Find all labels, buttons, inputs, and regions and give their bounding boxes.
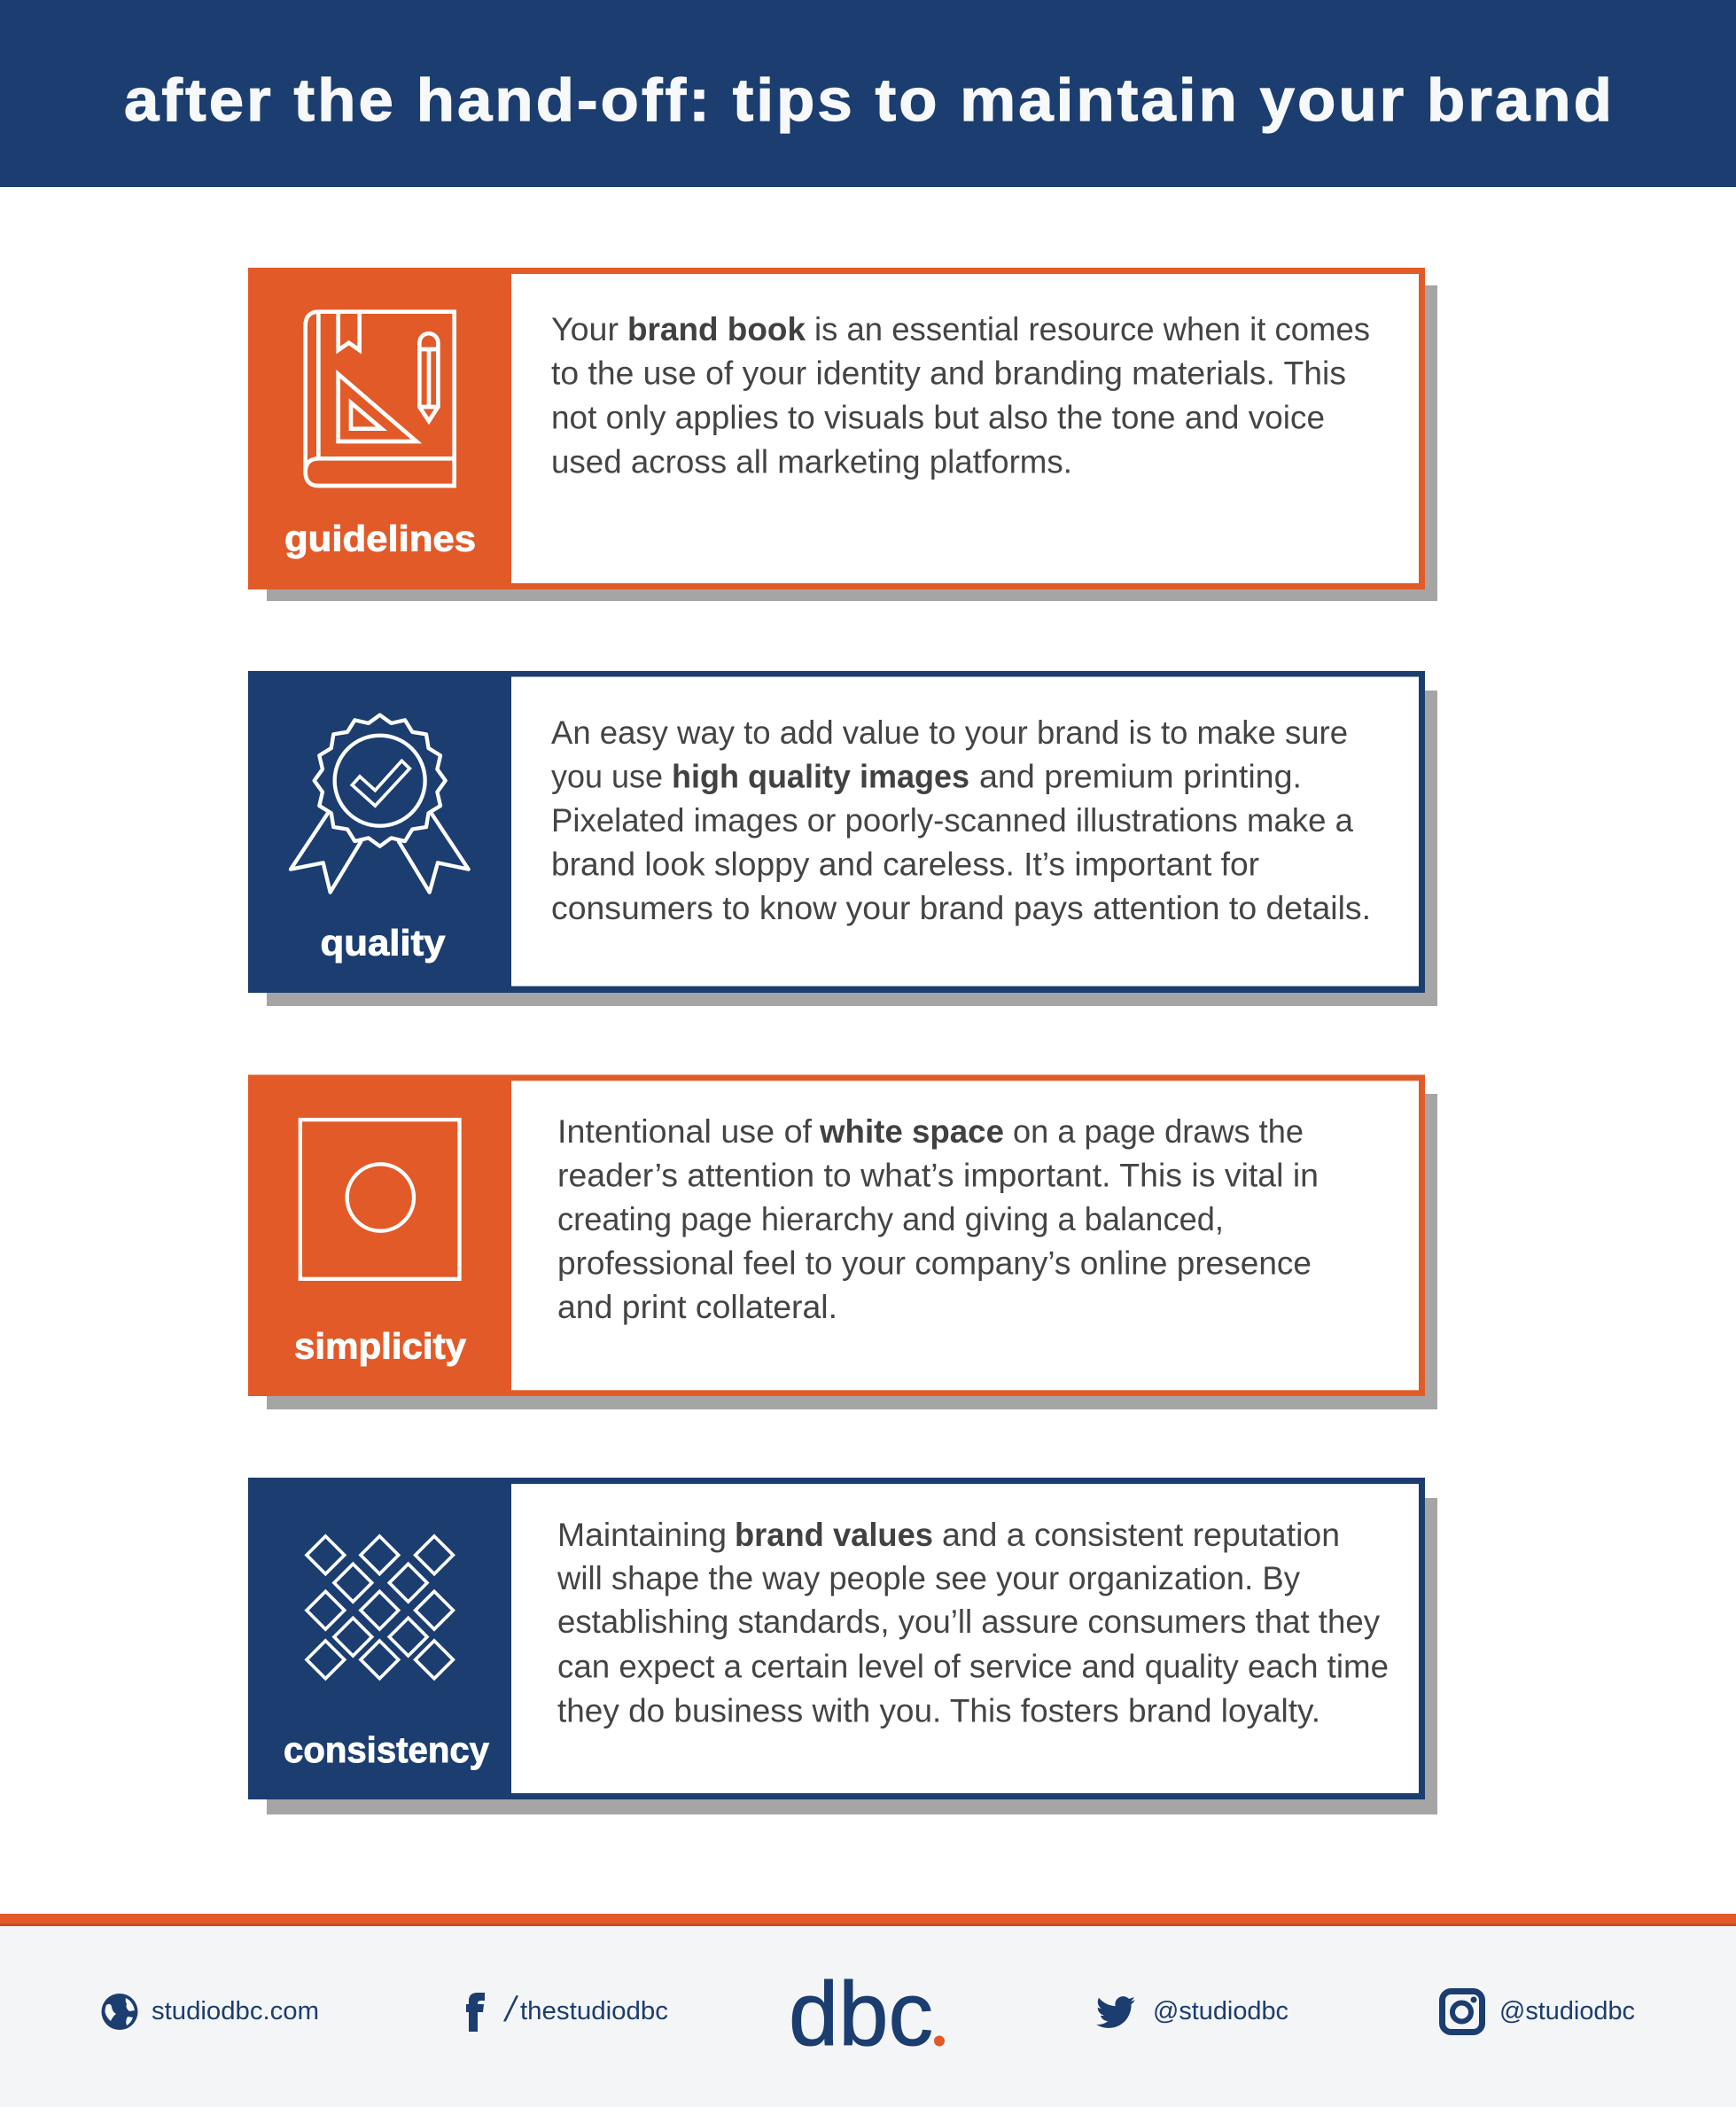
text block: quality: An easy way to add value to your brand is to make sure <box>551 714 1348 751</box>
title: after the hand-off: tips to maintain your brand <box>124 66 1615 134</box>
website link: studiodbc.com <box>152 1997 319 2025</box>
text block: quality: brand look sloppy and careless. It’s important for <box>551 847 1259 883</box>
header banner <box>0 0 1736 187</box>
text block: quality: high quality images <box>672 759 969 795</box>
text block: consistency: and a consistent reputation <box>942 1517 1340 1553</box>
text block: guidelines: not only applies to visuals but also the tone and voice <box>551 399 1325 435</box>
label: guidelines: guidelines <box>284 519 476 559</box>
text block: guidelines: used across all marketing platforms. <box>551 443 1072 480</box>
text block: consistency: Maintaining <box>557 1517 727 1553</box>
text block: consistency: brand values <box>735 1517 933 1553</box>
icon: circle in a square <box>300 1120 459 1279</box>
text block: simplicity: reader’s attention to what’s important. This is vital in <box>557 1158 1319 1194</box>
icon: book with set square and pencil <box>306 312 455 486</box>
text block: simplicity: on a page draws the <box>1013 1113 1304 1150</box>
panel: guidelines <box>248 268 1437 601</box>
logo: dbc: dbc <box>789 1963 933 2064</box>
text block: simplicity: and print collateral. <box>557 1289 837 1325</box>
twitter handle: @studiodbc <box>1153 1997 1288 2025</box>
text block: quality: and premium printing. <box>979 759 1302 795</box>
text block: simplicity: professional feel to your company’s online presence <box>557 1245 1312 1282</box>
text block: consistency: establishing standards, you’ll assure consumers that they <box>557 1604 1380 1640</box>
text block: guidelines: to the use of your identity and branding materials. This <box>551 355 1346 392</box>
text block: guidelines: brand book <box>627 311 806 347</box>
text block: consistency: they do business with you. This fosters brand loyalty. <box>557 1693 1320 1729</box>
panel: quality <box>248 671 1437 1006</box>
text block: quality: consumers to know your brand pays attention to details. <box>551 890 1371 926</box>
text block: quality <box>551 714 1371 926</box>
text block: guidelines <box>551 311 1370 480</box>
text block: simplicity <box>557 1113 1319 1325</box>
text block: simplicity: Intentional use of <box>557 1113 813 1150</box>
icon: award rosette with check mark <box>291 715 469 893</box>
text block: consistency: will shape the way people see your organization. By <box>557 1560 1300 1596</box>
text block: guidelines: Your <box>551 311 619 347</box>
text block: quality: Pixelated images or poorly-scanned illustrations make a <box>551 802 1353 839</box>
icon: globe <box>101 1994 138 2030</box>
panel: simplicity <box>248 1074 1437 1409</box>
text block: consistency <box>557 1517 1389 1729</box>
footer <box>0 1914 1736 2107</box>
facebook handle: / <box>502 1988 521 2030</box>
label: quality: quality <box>321 922 446 963</box>
text block: consistency: can expect a certain level of service and quality each time <box>557 1649 1389 1684</box>
icon: diamond lattice <box>307 1536 453 1679</box>
text block: quality: you use <box>551 759 663 795</box>
panel: consistency <box>248 1478 1437 1814</box>
icon: twitter bird <box>1096 1996 1135 2028</box>
text block: simplicity: white space <box>819 1113 1004 1150</box>
icon: instagram <box>1443 1991 1482 2032</box>
text block: guidelines: is an essential resource when it comes <box>814 311 1370 347</box>
text block: simplicity: creating page hierarchy and giving a balanced, <box>557 1201 1224 1237</box>
instagram handle: @studiodbc <box>1499 1997 1635 2025</box>
facebook handle: thestudiodbc <box>520 1997 668 2025</box>
icon: facebook <box>466 1993 485 2032</box>
label: consistency: consistency <box>284 1729 489 1770</box>
facebook handle <box>502 1988 668 2030</box>
label: simplicity: simplicity <box>294 1326 466 1367</box>
